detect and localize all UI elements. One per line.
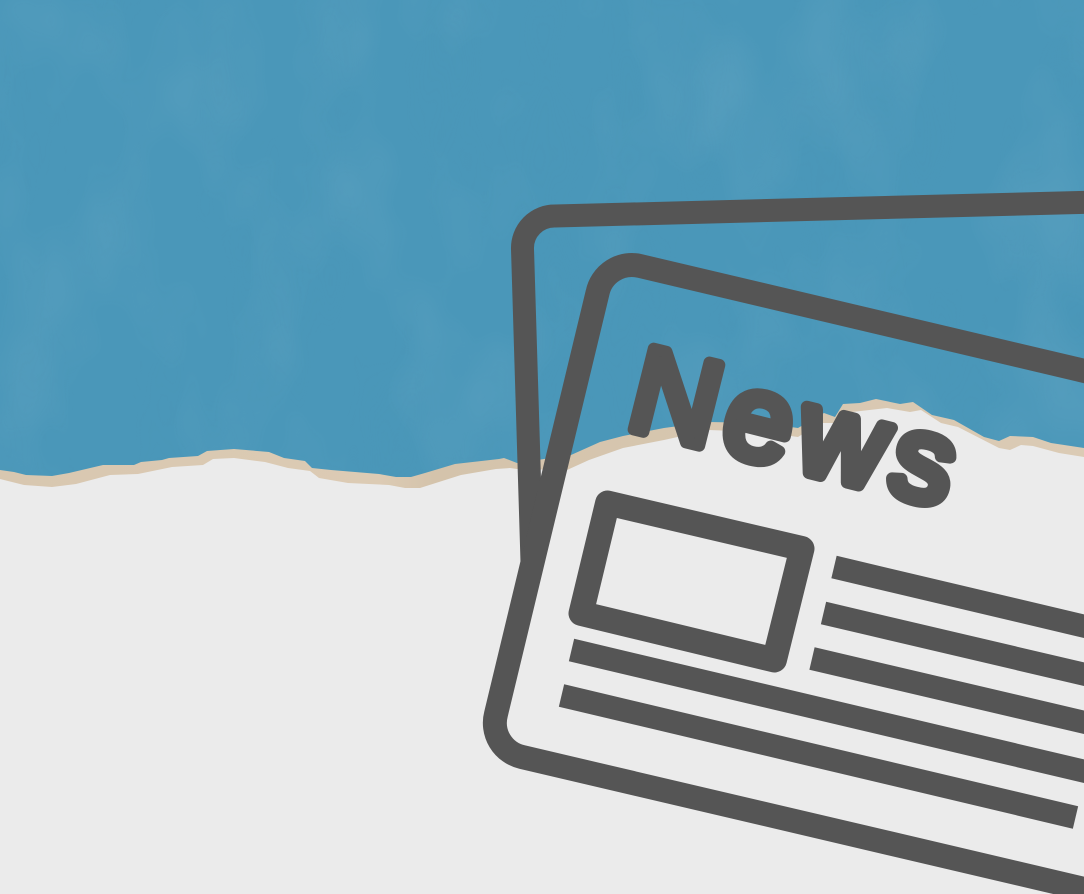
- torn paper edge: beige fibre: [0, 399, 1084, 520]
- front page outline: [495, 265, 1084, 894]
- white paper lower section: [0, 408, 1084, 894]
- icon: newspaper: [495, 202, 1084, 894]
- background: blue crumpled paper: [0, 0, 1084, 520]
- heading: News: News: [618, 320, 979, 534]
- photo placeholder: [581, 503, 802, 660]
- text lines: [562, 567, 1084, 818]
- back page outline: [522, 202, 1084, 562]
